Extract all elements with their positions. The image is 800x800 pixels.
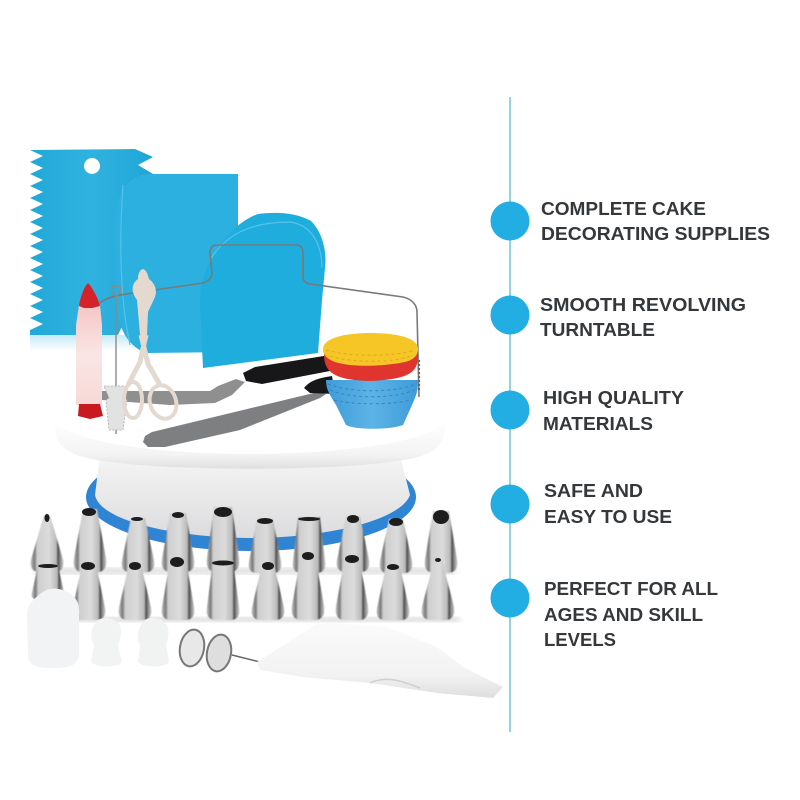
upper row shadow bbox=[35, 568, 455, 574]
timeline line bbox=[509, 97, 511, 732]
icon: large coupler bbox=[27, 589, 79, 668]
label line 3: LEVELS bbox=[544, 629, 616, 650]
icon: flower scissors bbox=[124, 269, 181, 422]
bullet bbox=[490, 484, 530, 524]
icon: flower nails bbox=[177, 628, 260, 673]
icon: small coupler right bbox=[138, 618, 169, 666]
left leg bbox=[128, 335, 146, 385]
lower nozzle openings bbox=[38, 552, 441, 570]
icon: square scraper bbox=[115, 174, 238, 353]
handle bbox=[243, 355, 330, 384]
icon: back spatula bbox=[102, 355, 330, 405]
icon: small coupler left bbox=[91, 618, 122, 666]
upper nozzle openings bbox=[44, 507, 449, 526]
blade bbox=[102, 379, 245, 405]
feature 5 bbox=[490, 578, 718, 650]
label: SMOOTH REVOLVING bbox=[540, 294, 746, 315]
turntable base bbox=[86, 443, 416, 551]
icon: cleaning brush bbox=[104, 286, 129, 434]
barrel bbox=[76, 305, 102, 405]
icon: rounded scraper bbox=[200, 213, 325, 368]
head bbox=[133, 269, 156, 335]
rim bbox=[55, 420, 445, 469]
label: COMPLETE CAKE bbox=[541, 198, 706, 219]
scraper inner highlight bbox=[121, 185, 322, 345]
label line 2: DECORATING SUPPLIES bbox=[541, 223, 770, 244]
blue cases bbox=[326, 380, 418, 429]
handle bbox=[304, 376, 335, 394]
feature 4 bbox=[490, 480, 672, 527]
scraper reflections bbox=[30, 335, 245, 351]
red cases bbox=[324, 350, 418, 381]
icon: piping bag bbox=[257, 622, 503, 698]
cone bbox=[95, 455, 410, 538]
label: HIGH QUALITY bbox=[543, 387, 685, 408]
turntable top bbox=[55, 382, 445, 469]
label line 2: EASY TO USE bbox=[544, 506, 672, 527]
icon: toothed scraper bbox=[30, 149, 153, 335]
icon: cake leveler wire bbox=[100, 245, 419, 397]
bullet bbox=[490, 578, 530, 618]
feature 3 bbox=[490, 387, 685, 434]
bullet bbox=[490, 390, 530, 430]
blade bbox=[143, 392, 326, 447]
bullet bbox=[490, 296, 530, 334]
left ring bbox=[124, 382, 142, 418]
upper row of piping nozzles bbox=[31, 507, 457, 573]
label line 2: MATERIALS bbox=[543, 413, 653, 434]
feature 1 bbox=[490, 198, 770, 244]
lower row shadow bbox=[70, 617, 460, 622]
label: SAFE AND bbox=[544, 480, 643, 501]
bullet bbox=[490, 202, 530, 240]
right leg bbox=[141, 335, 160, 385]
red base bbox=[78, 404, 103, 419]
label line 2: TURNTABLE bbox=[540, 319, 655, 340]
blue ring bbox=[86, 443, 416, 551]
yellow cases bbox=[323, 333, 418, 366]
icon: front spatula bbox=[143, 376, 335, 447]
label: PERFECT FOR ALL bbox=[544, 578, 718, 599]
icon: decorating pen bbox=[76, 283, 103, 419]
leveler foot spring bbox=[418, 360, 420, 392]
red tip bbox=[79, 283, 100, 308]
lower row of piping nozzles bbox=[32, 555, 454, 620]
icon: silicone cupcake cases bbox=[323, 333, 418, 429]
surface bbox=[55, 382, 445, 454]
right ring bbox=[145, 382, 181, 422]
label line 2: AGES AND SKILL bbox=[544, 604, 703, 625]
feature 2 bbox=[490, 294, 746, 340]
